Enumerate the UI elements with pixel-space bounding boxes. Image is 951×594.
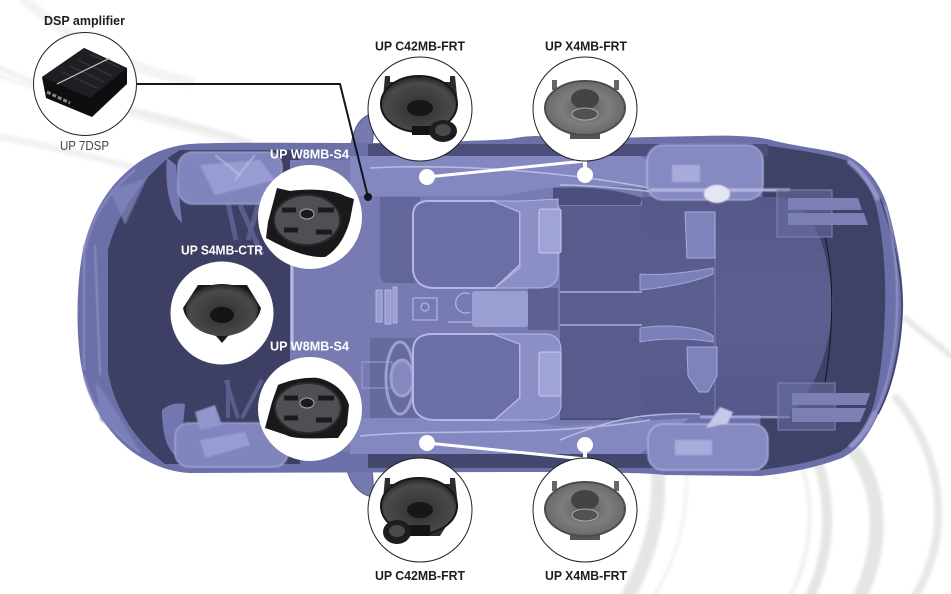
label: X4 top: UP X4MB-FRT bbox=[545, 40, 627, 54]
dark gap behind console bbox=[528, 288, 558, 330]
front struts: bottom bbox=[226, 380, 262, 418]
front footwell: bottom bbox=[370, 338, 420, 418]
black connector line bbox=[137, 84, 372, 201]
icon: woofer and tweeter bbox=[381, 76, 458, 142]
white connector: bottom bbox=[419, 435, 593, 460]
car outline bbox=[78, 136, 903, 476]
rear seat: middle bbox=[560, 293, 642, 326]
wheel: front bottom bbox=[175, 405, 288, 467]
rear box: bottom bbox=[778, 383, 870, 430]
label: W8 bottom: UP W8MB-S4 bbox=[270, 340, 349, 354]
console gear bbox=[413, 293, 472, 322]
front seat: top bbox=[413, 199, 561, 288]
icon: subwoofer bbox=[266, 188, 354, 257]
dark hood bbox=[108, 150, 300, 464]
callout: C42 bottom bbox=[368, 458, 472, 562]
label: DSP amplifier: DSP amplifier bbox=[44, 14, 125, 28]
side mirror: bottom bbox=[347, 470, 373, 497]
white connector: top bbox=[419, 160, 593, 185]
callout: X4 bottom bbox=[533, 458, 637, 562]
bottom side sill band bbox=[350, 418, 690, 454]
rear seat: bottom bbox=[560, 326, 642, 418]
icon: coaxial speaker bbox=[545, 80, 625, 139]
callout: W8 bottom bbox=[258, 357, 362, 461]
dark wedge near rear seat: bottom bbox=[560, 414, 640, 420]
icon: woofer and tweeter bbox=[381, 478, 458, 544]
callout: C42 top bbox=[368, 57, 472, 161]
wheel: front top bbox=[178, 152, 282, 204]
label: UP 7DSP: UP 7DSP bbox=[60, 138, 109, 153]
dark wedge near rear seat: top bbox=[553, 187, 642, 205]
dashboard vents bbox=[376, 287, 397, 324]
label: W8 top: UP W8MB-S4 bbox=[270, 148, 349, 162]
icon: centre speaker bbox=[183, 284, 261, 343]
icon: amplifier bbox=[42, 48, 127, 117]
rear box: top bbox=[777, 190, 868, 237]
label: X4 bottom: UP X4MB-FRT bbox=[545, 569, 627, 583]
callout: S4 centre bbox=[170, 262, 274, 364]
label: C42 top: UP C42MB-FRT bbox=[375, 40, 465, 54]
centre console bbox=[472, 291, 528, 327]
rear seat: top bbox=[560, 206, 642, 296]
label: S4 centre: UP S4MB-CTR bbox=[181, 244, 263, 258]
rear seat bolsters bbox=[640, 268, 713, 342]
rear vertical frame bbox=[714, 212, 716, 420]
front bumper band details bbox=[84, 170, 147, 452]
top side sill band bbox=[350, 156, 690, 196]
front footwell: top bbox=[380, 197, 420, 283]
bottom dark sill bbox=[368, 454, 768, 468]
callout: W8 top bbox=[258, 165, 362, 269]
wheel: rear bottom bbox=[648, 407, 790, 470]
mudguard: front top bbox=[166, 158, 182, 223]
side mirror: top bbox=[351, 115, 373, 146]
callout: DSP amplifier bbox=[34, 32, 136, 136]
icon: subwoofer bbox=[265, 378, 349, 438]
rear window line bbox=[825, 237, 832, 383]
front seat: bottom bbox=[413, 334, 561, 420]
icon: coaxial speaker bbox=[545, 481, 625, 540]
outer dark rim at rear bbox=[878, 198, 902, 414]
cabin floor bbox=[290, 160, 642, 452]
steering wheel bbox=[362, 342, 414, 414]
front struts: top bbox=[228, 203, 262, 255]
labels bbox=[44, 14, 627, 583]
wheel: rear top bbox=[647, 145, 790, 203]
mudguard: front bottom bbox=[162, 404, 185, 458]
callout: X4 top bbox=[533, 57, 637, 161]
top dark sill bbox=[368, 144, 768, 156]
sill highlights bbox=[292, 167, 700, 440]
rear floor bbox=[640, 197, 833, 415]
rear right band streaks bbox=[848, 161, 897, 447]
dark rear bbox=[760, 145, 885, 470]
car body bbox=[78, 115, 903, 497]
strut: rear bottom bbox=[687, 347, 717, 392]
label: C42 bottom: UP C42MB-FRT bbox=[375, 569, 465, 583]
strut: rear top bbox=[685, 212, 715, 258]
